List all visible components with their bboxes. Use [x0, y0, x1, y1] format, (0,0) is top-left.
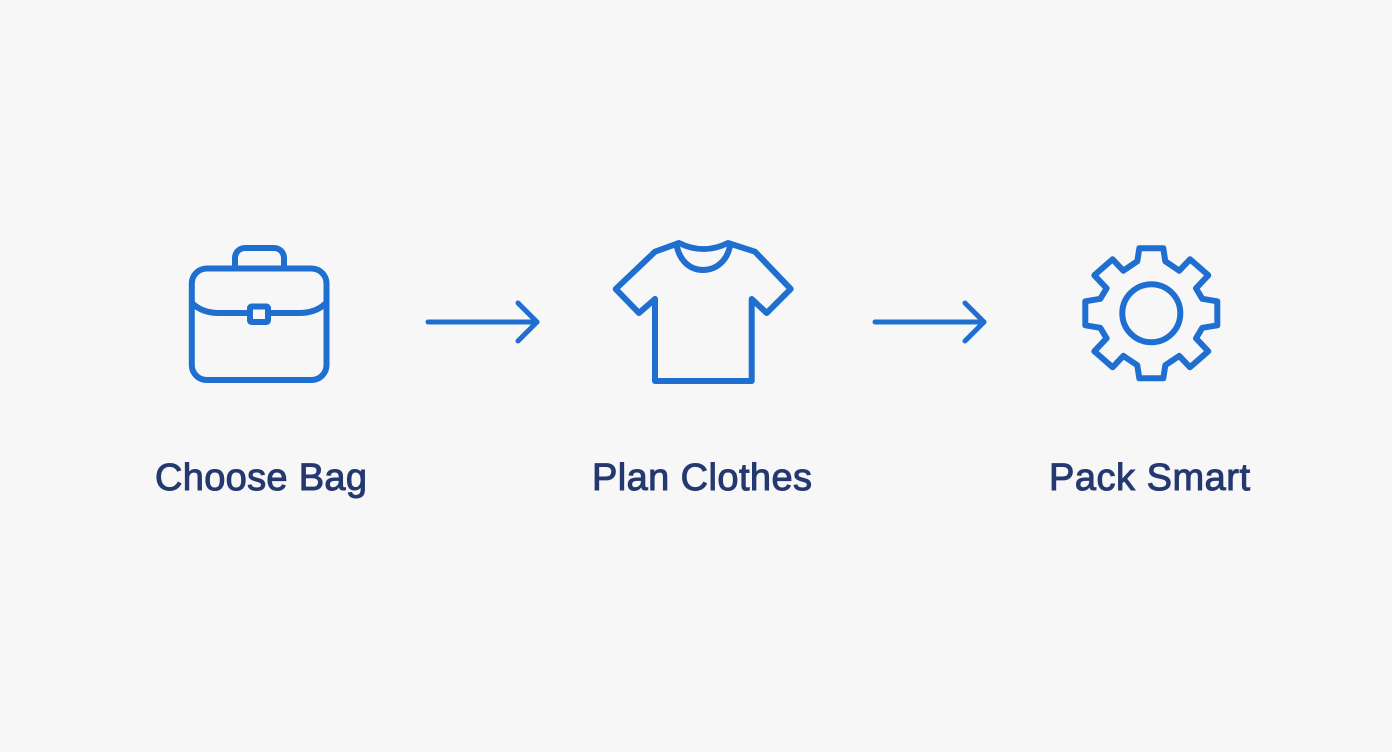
arrow: bag to clothes — [428, 303, 537, 341]
icon: t-shirt — [616, 243, 791, 381]
label: Choose Bag: Choose Bag — [155, 457, 367, 499]
arrow: clothes to gear — [875, 303, 984, 341]
label: Pack Smart: Pack Smart — [1049, 457, 1250, 499]
label: Plan Clothes: Plan Clothes — [592, 457, 812, 499]
icon: briefcase — [192, 248, 326, 380]
icon: gear — [1085, 248, 1217, 378]
